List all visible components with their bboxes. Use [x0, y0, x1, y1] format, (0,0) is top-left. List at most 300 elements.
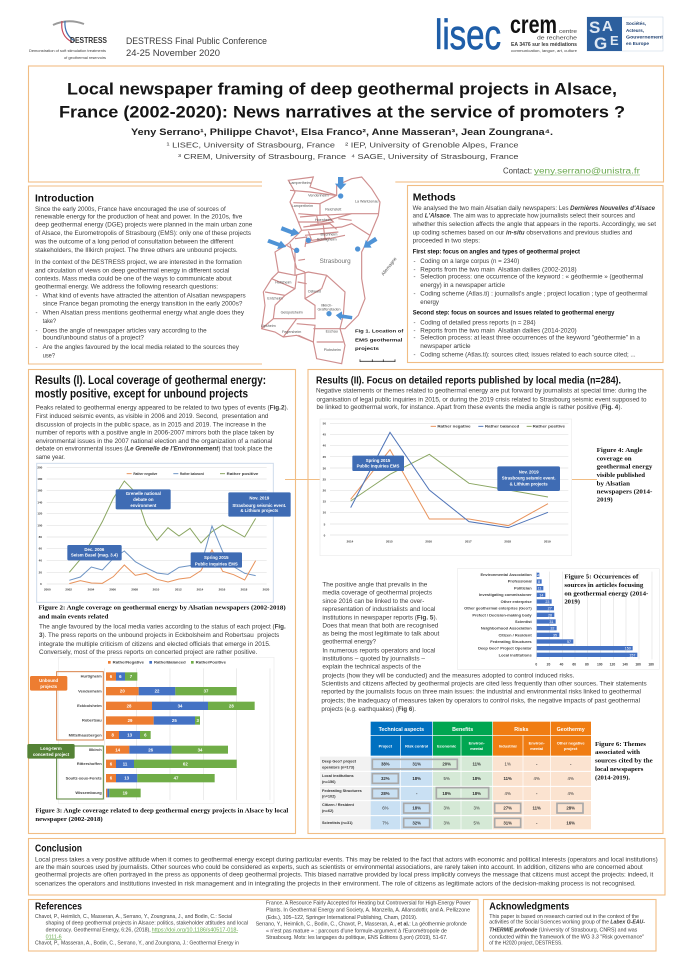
- axis labels: [535, 663, 654, 667]
- text block: first step: First step: focus on angles and types of geothermal project: [413, 250, 580, 256]
- text block: conclusion: geothermal projects are often portrayed in the press as opponents of deep geothermal projects. This biased narrative provided by local press implicitly conveys the message that citizens must accept the projects: indeed, it: [35, 873, 654, 879]
- category labels: Deep Geo? Project Operator: [478, 646, 532, 651]
- logo: SAGE: A: [602, 18, 613, 35]
- contact: yeny.serrano@unistra.fr: [534, 166, 640, 176]
- axis labels: 40: [560, 663, 564, 667]
- chart axes labels: 2006: [109, 587, 116, 591]
- callout: Spring 2015: Public inquiries EMS: [195, 561, 238, 566]
- frame: unbound projects: [57, 672, 103, 740]
- row labels: Federating Structures: [322, 789, 362, 793]
- figure 2 caption: [38, 605, 286, 620]
- list: research questions: -: [36, 328, 38, 334]
- figure 4 caption: by Alsatian: [597, 481, 631, 488]
- text block: results I peaks: debate on environmental issues ( Le Grenelle de l'Environnement ) that took place the: [36, 447, 273, 453]
- list: research questions: [36, 294, 246, 360]
- callout: Spring 2015: Public inquiries EMS: [357, 464, 400, 469]
- bars: Hurtigheim: [81, 674, 102, 679]
- bars: 6: [110, 776, 113, 781]
- callout: Nov. 2019: Nov. 2019: [249, 496, 270, 501]
- figure 2 caption: Figure 2: Angle coverage on geothermal energy by Alsatian newspapers (2002-2018): [38, 605, 286, 612]
- row labels: (n=156): [322, 780, 336, 784]
- text block: first step: -: [414, 292, 416, 298]
- table header: mental: [470, 746, 483, 751]
- text block: results II positive angle: explain the technical aspects of the: [322, 664, 422, 670]
- text block: introduction paragraphs: contexts. Mass media could be one of the ways to communicate about: [35, 276, 232, 282]
- figure 5 caption: on geothermal energy (2014-: [564, 591, 648, 598]
- map: commune names: Lampertheim: [289, 181, 311, 185]
- text block: references column 2: France. A Resource Fairly Accepted for Heating but Controversial for High-Energy Power: [266, 900, 471, 906]
- chart axes labels: 2018: [504, 539, 511, 543]
- text block: results II positive angle: as being the most legitimate to talk about: [322, 632, 440, 638]
- chart axes labels: 2014: [347, 539, 354, 543]
- bars: 20: [120, 689, 125, 694]
- logo: CREM: centre: [559, 29, 577, 35]
- affiliations: ³ CREM, University of Strasbourg, France ⁴ SAGE, University of Strasbourg, France: [178, 152, 518, 161]
- figure 3 caption: [35, 808, 289, 823]
- chart axes labels: 0: [40, 582, 42, 586]
- chart axes labels: 40: [39, 559, 42, 563]
- logo: CREM: communication, langue, art, culture: [511, 49, 577, 53]
- text block: conclusion: [35, 857, 658, 887]
- contact: Contact:: [503, 166, 532, 176]
- text block: first step: -: [414, 267, 416, 273]
- map: commune names: Fegersheim: [282, 330, 301, 334]
- row labels: Citizen / Resident: [322, 803, 355, 807]
- bars: 6: [110, 674, 113, 679]
- text block: results II positive angle: projects (e.g. earthquakes) (Fig 6).: [321, 707, 416, 713]
- text block: first step: Reports from the two main Alsatian dailies (2002-2018): [420, 267, 577, 273]
- category labels: Environmental Association: [480, 572, 532, 577]
- map: commune names: Allemagne: [380, 256, 398, 277]
- figure 4 caption: geothermal energy: [597, 464, 653, 471]
- text block: methods intro: [412, 206, 656, 245]
- legend: [431, 425, 565, 429]
- text block: results II positive angle: geothermal energy?: [322, 640, 377, 646]
- logo: SAGE: E: [610, 33, 619, 48]
- table values: 28%: [381, 791, 390, 796]
- callout: Nov. 2019: [497, 466, 560, 491]
- bars: Rittershoffen: [77, 761, 102, 766]
- figure 6 caption: local newspapers: [595, 766, 644, 773]
- conference name: [126, 36, 267, 58]
- value labels: 32: [550, 627, 554, 631]
- table header: Environ-: [529, 740, 545, 745]
- legend: RatherNegative: [113, 661, 144, 665]
- logo: CREM: [510, 11, 577, 53]
- bars: Illkirch: [89, 747, 102, 752]
- text block: first step: -: [414, 275, 416, 281]
- text block: introduction paragraphs: and circulation of views on deep geothermal energy in different social: [35, 268, 229, 274]
- text block: results II positive angle: since 2016 can be linked to the over-: [322, 599, 424, 605]
- text block: introduction paragraphs: was the outcome of a long period of consultation between the different: [34, 239, 234, 245]
- callout: long-term concerted project: Long-term: [40, 746, 62, 751]
- text block: acknowledgments: conducted within the framework of the WG 3.3 "Risk governance": [489, 935, 644, 941]
- category labels: Other enterprise: [501, 599, 532, 604]
- text block: results II positive angle: projects; the inadequacy of measures taken by operators to control risks, the negative impacts of past geothermal: [321, 698, 640, 704]
- callout: Spring 2015: Spring 2015: [204, 555, 229, 560]
- figure 6 caption: (2014-2019).: [595, 774, 630, 781]
- bars: 28: [229, 703, 234, 708]
- callout: Nov. 2019: & Lithium projects: [240, 508, 279, 513]
- legend: Rather negative: [437, 425, 471, 429]
- text block: first step: -: [414, 259, 416, 265]
- text block: results II positive angle: Scientists and citizens affected by geothermal projects are cited less frequently than other sources. Their statements: [321, 681, 647, 687]
- chart axes labels: [37, 465, 270, 591]
- text block: second step: Reports from the two main Alsatian dailies (2014-2020): [420, 328, 577, 334]
- text block: conclusion: scenarizes the operators and institutions invested in risk management and in integrating the projects in their environment. The role of citizens as legitimate actors of the decision-making process is not recognised.: [35, 881, 636, 887]
- table values: 4%: [568, 776, 574, 781]
- callout: Spring 2015: [191, 552, 242, 568]
- series: rather balanced: [69, 526, 256, 580]
- map: commune names: Graffenstaden: [317, 308, 341, 312]
- table values: -: [536, 791, 538, 796]
- table values: 38%: [381, 762, 390, 767]
- map: commune names: Reichstett: [325, 208, 341, 212]
- text block: results II intro: be linked to geothermal work, for instance. Apart from these events the media angle is rather positive ( Fig. 4).: [316, 405, 623, 411]
- value labels: 35: [553, 633, 557, 637]
- text block: introduction paragraphs: In the context of the DESTRESS project, we are interested in the formation: [35, 260, 242, 266]
- axis labels: 0: [535, 663, 537, 667]
- table header: Geothermy: [557, 727, 585, 733]
- heading: results II: Results (II). Focus on detailed reports published by local media (n=284).: [316, 374, 621, 386]
- map: commune names: Holtzheim: [275, 281, 291, 285]
- text block: results I peaks: Peaks related to geothermal energy appeared to be related to two types of events ( Fig.2).: [36, 406, 289, 412]
- table values: -: [536, 820, 538, 825]
- text block: results II positive angle: [321, 582, 647, 713]
- list: research questions: -: [36, 294, 38, 300]
- heading: results I: mostly positive, except for unbound projects: [35, 386, 248, 400]
- legend: [108, 661, 226, 665]
- callout: Nov. 2019: Nov. 2019: [519, 470, 539, 475]
- panel: title block: [28, 66, 664, 182]
- series: rather negative: [351, 450, 548, 526]
- list: research questions: since France began promoting the energy transition in the early 2000s?: [43, 302, 243, 308]
- callout: Dec. 2006: Dec. 2006: [84, 547, 105, 552]
- chart axes labels: [323, 422, 551, 543]
- callout: Nov. 2019: [228, 492, 291, 517]
- figure 5 caption: [564, 574, 648, 606]
- bars: 6: [110, 761, 113, 766]
- table header: Project: [379, 743, 393, 748]
- text block: acknowledgments: of the H2020 project, DESTRESS.: [489, 941, 563, 947]
- figure 2 caption: and main events related: [38, 613, 109, 620]
- highlight frames: [372, 759, 583, 827]
- category labels: Citizen / Resident: [498, 632, 532, 637]
- table values: -: [536, 762, 538, 767]
- figure 1 caption: EMS geothermal: [355, 338, 402, 344]
- table: figure 6 themes by source: [320, 722, 591, 829]
- text block: results I status: [39, 625, 286, 656]
- table values: 18%: [472, 791, 481, 796]
- logo: SAGE: Sociétés,: [626, 21, 646, 26]
- figure 4 caption: coverage on: [597, 455, 632, 462]
- chart: figure 5 source occurrences: [457, 569, 659, 669]
- text block: results II intro: [316, 389, 647, 411]
- value labels: 150: [625, 647, 631, 651]
- text block: references column 2: [256, 900, 471, 941]
- table values: 1%: [505, 762, 511, 767]
- series: rather balanced: [351, 432, 548, 528]
- row labels: Deep Geo? project: [322, 760, 357, 764]
- chart axes labels: 2016: [425, 539, 432, 543]
- map: project location markers: [268, 177, 377, 320]
- bars: 13: [124, 776, 130, 781]
- text block: second step: newspaper article: [420, 344, 471, 350]
- callout: Nov. 2019: Strasbourg seismic event.: [502, 476, 556, 481]
- heading: conclusion: Conclusion: [35, 843, 82, 855]
- heading: results I: [35, 373, 266, 400]
- text block: introduction paragraphs: of Alsace, the Eurometropolis of Strasbourg (EMS): only one of these projects: [35, 231, 251, 237]
- value labels: 157: [629, 653, 635, 657]
- text block: results I peaks: First induced seismic events, as visible in 2006 and 2019. Second, presentation and: [36, 414, 268, 420]
- text block: first step: energy) in a newspaper article: [420, 283, 506, 289]
- table header: Environ-: [469, 740, 485, 745]
- figure 6 caption: sources cited by the: [595, 758, 653, 765]
- category labels: Neighborhood Association: [481, 626, 532, 631]
- category labels: Professional: [508, 579, 532, 584]
- logo: SAGE: Acteurs,: [626, 28, 644, 33]
- figure 1 caption: [354, 326, 404, 352]
- bars: [537, 573, 637, 657]
- row labels: (n=62): [322, 809, 334, 813]
- logo: SAGE: G: [594, 34, 607, 53]
- axis labels: 140: [622, 663, 628, 667]
- table header: mental: [530, 746, 543, 751]
- text block: results I peaks: same year.: [36, 455, 65, 461]
- callout: long-term concerted project: concerted project: [33, 752, 70, 757]
- table values: 18%: [442, 791, 451, 796]
- text block: references column 2: Strasbourg. Mots: les langages du politique, ENS Éditions (Lyon) (2019), 51-67.: [266, 934, 448, 941]
- axis labels: 20: [547, 663, 551, 667]
- chart axes labels: 2010: [153, 587, 160, 591]
- table header: Benefits: [452, 727, 473, 733]
- table values: 20%: [442, 762, 451, 767]
- chart axes labels: 15: [323, 500, 326, 504]
- chart axes labels: 45: [323, 433, 326, 437]
- frame: concerted projects: [57, 746, 103, 799]
- axis labels: 100: [597, 663, 603, 667]
- value labels: 14: [539, 593, 543, 597]
- text block: references column 2: « n'est pas mature » : parcours d'une formule-argument à l'Eurométropole de: [266, 928, 447, 934]
- category labels: Local institutions: [499, 652, 532, 657]
- value labels: 23: [545, 600, 549, 604]
- panel: introduction: [28, 186, 262, 364]
- chart axes labels: 25: [323, 478, 326, 482]
- bars: 37: [204, 689, 209, 694]
- callout: Spring 2015: Spring 2015: [366, 458, 391, 463]
- logo: SAGE: Gouvernement: [626, 34, 664, 40]
- value labels: [537, 573, 635, 657]
- table values: [381, 762, 575, 825]
- text block: results II positive angle: media coverage of geothermal projects: [322, 591, 432, 597]
- bars: 19: [123, 791, 128, 796]
- map: commune names: Schiltigheim: [317, 238, 337, 242]
- text block: references column 1: 0111-6: [46, 935, 62, 941]
- table values: 3%: [444, 820, 450, 825]
- map: commune names: Lampertheim: [292, 204, 313, 208]
- table values: 28%: [566, 806, 575, 811]
- logo: DESTRESS: of geothermal reservoirs: [64, 56, 106, 60]
- legend: Rather balanced: [485, 425, 519, 429]
- text block: results I status: 3). The press reports on the unbound projects in Eckbolsheim and Robertsau projects: [39, 633, 279, 639]
- list: research questions: When Alsatian press mentions geothermal energy what angle does they: [43, 311, 244, 317]
- category labels: Politician: [514, 586, 532, 591]
- bars: Eckbolsheim: [77, 703, 102, 708]
- text block: results II positive angle: In numerous reports operators and local: [322, 648, 435, 654]
- chart axes labels: 2019: [544, 539, 551, 543]
- text block: results I peaks: environmental issues in the 2007 national election and the organization of a national: [36, 439, 272, 445]
- text block: results I status: Conversely, most of the press reports on concerted project are rather positive.: [39, 650, 258, 656]
- logo: CREM: EA 3476 sur les médiations: [511, 42, 577, 48]
- text block: results II positive angle: institutions in newspaper reports ( Fig. 5).: [322, 615, 438, 621]
- text block: first step: Selection process: one occurrence of the keyword : « géothermie » (geothermal: [420, 275, 643, 281]
- panel: conclusion: [28, 838, 665, 895]
- legend: Rather positive: [227, 472, 259, 476]
- list: research questions: What kind of events have attracted the attention of Alsatian newspapers: [43, 294, 246, 300]
- panel: references: [28, 900, 478, 951]
- axis labels: 60: [572, 663, 576, 667]
- chart axes labels: 2018: [241, 587, 248, 591]
- conference name: 24-25 November 2020: [126, 48, 220, 58]
- map: commune names: Bischheim: [321, 232, 337, 236]
- list: research questions: -: [36, 311, 38, 317]
- bars: 29: [128, 718, 133, 723]
- table values: 32%: [412, 820, 421, 825]
- text block: first step: Coding on a large corpus (n = 2340): [420, 259, 519, 265]
- figure 3 caption: Figure 3: Angle coverage related to deep geothermal energy projects in Alsace by local: [35, 808, 289, 815]
- bars: 34: [178, 703, 183, 708]
- text block: methods intro: whether this selection affects the angle that appears in the reports. Accordingly, we set: [412, 222, 656, 228]
- chart: figure 3 stacked bars: [27, 657, 274, 803]
- chart axes labels: 10: [323, 511, 326, 515]
- value labels: 31: [549, 620, 553, 624]
- text block: results II positive angle: projects (how they will be conducted) and the measures adopted to control induced risks.: [322, 673, 575, 679]
- text block: results I peaks: [36, 406, 289, 461]
- table values: -: [570, 762, 572, 767]
- table values: 16%: [566, 820, 575, 825]
- legend: [127, 472, 259, 476]
- figure 6 caption: Figure 6: Themes: [595, 741, 647, 748]
- bars: Vendenheim: [78, 688, 102, 693]
- map: commune names: Entzheim: [267, 297, 283, 301]
- legend: Rather positive: [533, 425, 565, 429]
- figure 1 caption: Fig 1. Location of: [355, 329, 404, 335]
- text block: results I peaks: discussion of projects in the public space, as in 2015 and 2019. The increase in the: [36, 422, 267, 428]
- chart: figure 4 line chart: [320, 419, 572, 556]
- table values: 27%: [503, 806, 512, 811]
- map: commune names: Lipsheim: [261, 324, 276, 328]
- value labels: 28: [548, 613, 552, 617]
- text block: introduction paragraphs: [34, 207, 253, 290]
- callout: Grenelle: debate on: [133, 497, 154, 502]
- text block: second step: Coding of detailed press reports (n = 284): [420, 320, 536, 326]
- callout: unbound projects: Unbound: [39, 678, 59, 683]
- chart: figure 2 line chart: [37, 463, 291, 602]
- chart axes labels: 2012: [175, 587, 182, 591]
- chart axes labels: 50: [323, 422, 326, 426]
- text block: results II intro: Negative statements or themes related to geothermal energy are put forward by journalists at special time: during the: [316, 389, 647, 395]
- table values: 5%: [444, 776, 450, 781]
- series: rather positive: [69, 481, 256, 572]
- table values: 6%: [382, 806, 389, 811]
- table values: 11%: [503, 776, 512, 781]
- chart axes labels: 35: [323, 455, 326, 459]
- text block: references column 1: Chavot, P., Masseran, A., Bodin, C., Serrano, Y., and Zoungrana, J.: Geothermal Energy in: [35, 940, 239, 946]
- table values: 11%: [532, 806, 541, 811]
- map: location of EMS geothermal projects: [261, 176, 404, 367]
- map: commune names: Hoenheim: [315, 218, 332, 222]
- table values: 32%: [381, 776, 390, 781]
- text block: results II positive angle: reported by the journalists focus on three main issues: the industrial and environmental risks linked to geothermal: [321, 690, 641, 696]
- table header: Economic: [437, 743, 457, 748]
- chart axes labels: 2017: [465, 539, 472, 543]
- table values: 4%: [568, 791, 574, 796]
- chart axes labels: 140: [37, 500, 43, 504]
- row labels: Scientists (n=31): [322, 821, 353, 825]
- table values: 5%: [474, 820, 480, 825]
- category labels: Scientist: [515, 619, 532, 624]
- chart axes labels: 200: [37, 465, 43, 469]
- map: commune names: Strasbourg: [320, 258, 351, 265]
- axis labels: 160: [635, 663, 641, 667]
- chart axes labels: 60: [39, 547, 42, 551]
- text block: references column 1: [35, 914, 248, 946]
- text block: results I peaks: number of reports with a positive angle in 2006-2007 mirrors both the place taken by: [36, 431, 274, 437]
- chart axes labels: 2000: [44, 587, 51, 591]
- text block: methods intro: We analysed the two main Alsatian daily newspapers: Les Dernières Nouvelles d'Alsace: [413, 206, 656, 212]
- table values: 7%: [382, 820, 389, 825]
- bars: 6: [144, 733, 147, 738]
- map: commune names: Vendenheim: [308, 194, 329, 198]
- text block: first step: energy: [420, 300, 439, 306]
- text block: references column 1: Chavot, P., Heimlich, C., Masseran, A., Serrano, Y., Zoungrana, J., and Bodin, C.: Social: [35, 914, 232, 920]
- chart axes labels: 5: [324, 522, 326, 526]
- list: research questions: use?: [43, 354, 56, 360]
- table values: 31%: [503, 820, 512, 825]
- text block: first step: Coding scheme (Atlas.ti) : journalist's angle ; project location ; type of geothermal: [420, 292, 648, 298]
- chart axes labels: 40: [323, 444, 326, 448]
- category labels: Federating Structures: [490, 639, 532, 644]
- bars: [66, 672, 255, 797]
- table values: 4%: [505, 791, 511, 796]
- table header: Other negative: [557, 740, 585, 745]
- figure 4 caption: Figure 4: Angle: [597, 447, 643, 454]
- row labels: operators (n=173): [322, 766, 355, 770]
- heading: acknowledgments: Acknowledgments: [489, 901, 569, 913]
- chart axes labels: 2020: [263, 587, 270, 591]
- text block: results I status: The angle favoured by the local media varies according to the status of each project ( Fig.: [39, 625, 286, 631]
- row labels: [322, 760, 362, 825]
- figure 5 caption: Figure 5: Occurrences of: [564, 574, 639, 581]
- chart axes labels: 2016: [219, 587, 226, 591]
- text block: second step: -: [414, 320, 416, 326]
- callout: Grenelle: environment: [130, 503, 157, 508]
- text block: second step: -: [414, 353, 416, 359]
- legend: RatherBalanced: [154, 661, 186, 665]
- text block: second step: -: [414, 336, 416, 342]
- chart axes labels: 2015: [386, 539, 393, 543]
- axis labels: 80: [585, 663, 589, 667]
- bars: 25: [172, 718, 177, 723]
- figure 5 caption: 2019): [564, 599, 580, 606]
- text block: references column 2: Serrano, Y., Heimlich, C., Bodin, C., Chavot, P., Masseran, A., et al.: La géothermie profonde: [256, 921, 467, 927]
- map: scale bar: [360, 359, 395, 362]
- heading: methods: Methods: [413, 192, 456, 204]
- value labels: 8: [538, 580, 540, 584]
- chart axes labels: 80: [39, 535, 42, 539]
- figure 5 caption: sources in articles focusing: [564, 582, 644, 589]
- logo: DESTRESS: DESTRESS: [70, 36, 108, 45]
